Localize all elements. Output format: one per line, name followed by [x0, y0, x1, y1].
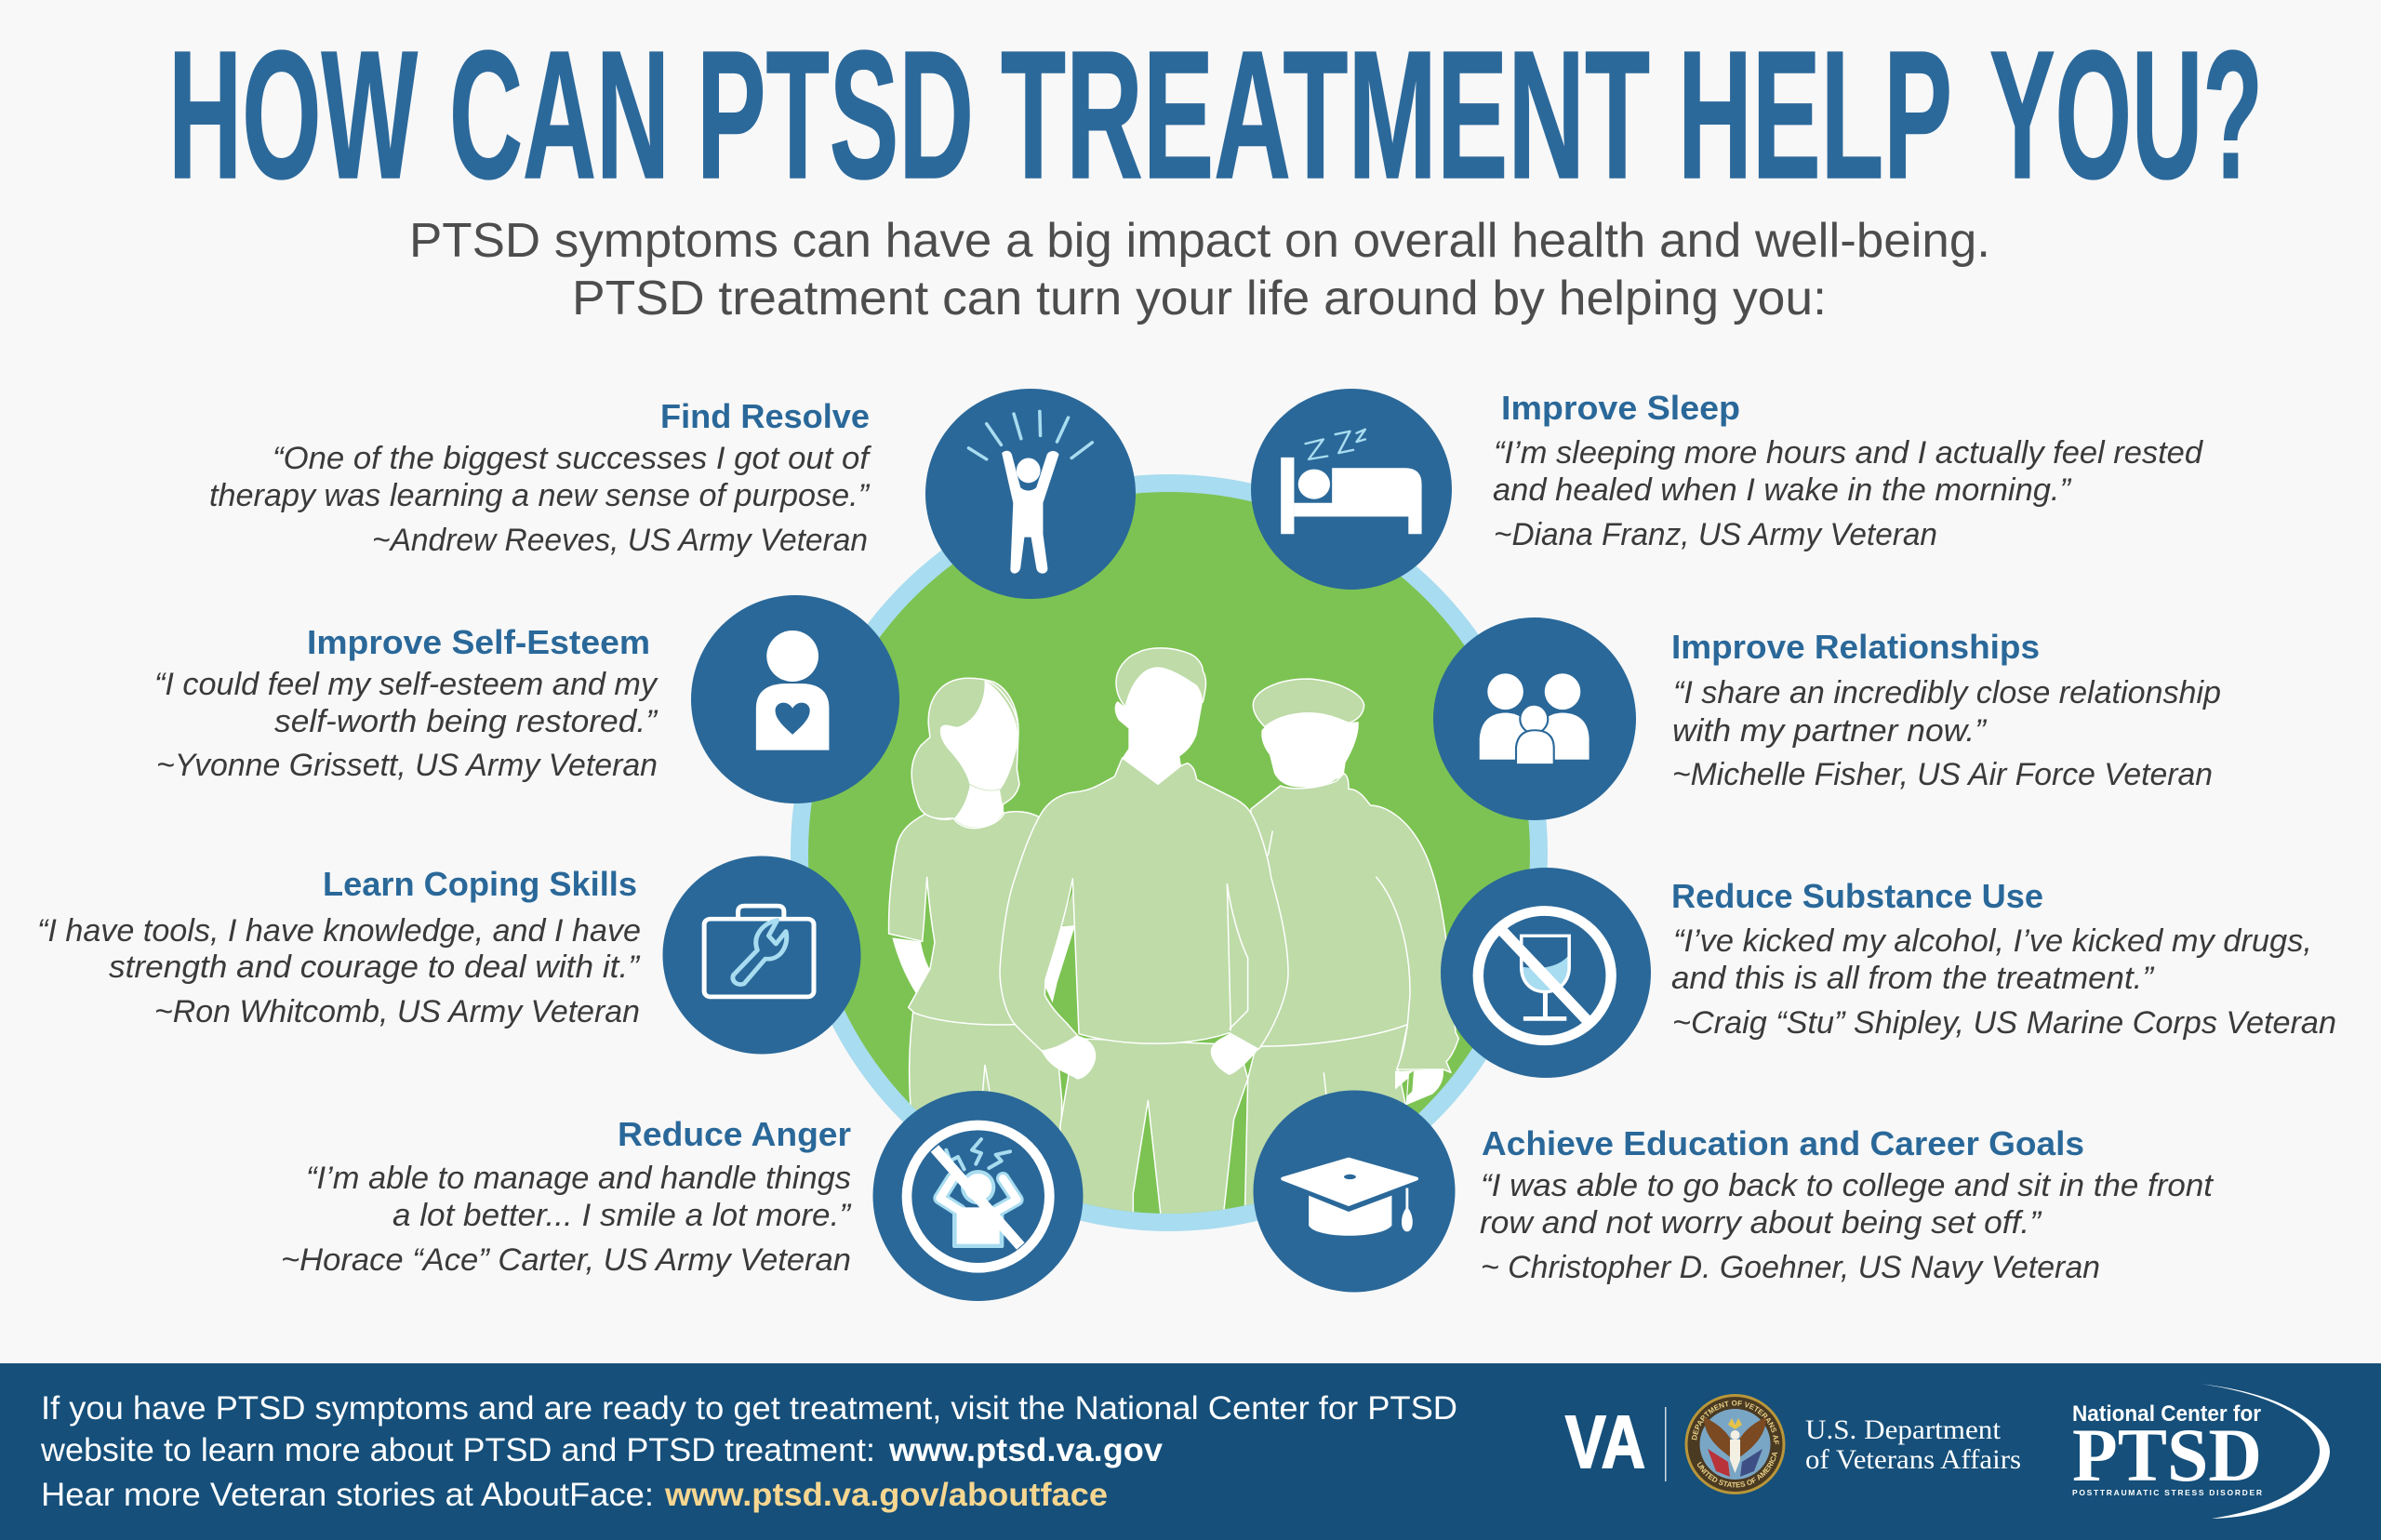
figure: woman: [887, 677, 1074, 1130]
icon: person celebrating: [968, 411, 1092, 574]
quote: self-worth being restored.”: [274, 704, 658, 739]
quote: [1493, 435, 2203, 508]
title: [168, 13, 2263, 217]
footer text: Hear more Veteran stories at AboutFace:: [41, 1477, 654, 1513]
badge: learn coping skills: [662, 856, 861, 1055]
badge: reduce anger: [872, 1091, 1083, 1301]
callout: reduce anger: [281, 1115, 852, 1278]
subtitle: PTSD symptoms can have a big impact on overall health and well-being.: [409, 214, 1990, 268]
callout: find resolve: [209, 397, 872, 558]
logo: VA: VA: [1565, 1401, 1645, 1483]
attribution: ~Michelle Fisher, US Air Force Veteran: [1672, 757, 2213, 792]
callout: improve self-esteem: [154, 623, 658, 783]
subtitle: PTSD treatment can turn your life around by helping you:: [572, 272, 1827, 325]
quote: “I’m sleeping more hours and I actually feel rested: [1494, 435, 2203, 471]
quote: “I have tools, I have knowledge, and I have: [37, 913, 641, 949]
badge: find resolve: [925, 389, 1136, 599]
footer text: [40, 1390, 1457, 1513]
badge: improve relationships: [1433, 617, 1636, 820]
heading: Learn Coping Skills: [323, 865, 637, 903]
icon: person with heart: [756, 631, 829, 750]
heading: Achieve Education and Career Goals: [1482, 1124, 2084, 1162]
logo: department name: U.S. Department: [1805, 1414, 2002, 1445]
quote: “I’ve kicked my alcohol, I’ve kicked my drugs,: [1673, 923, 2312, 959]
figure: central man: [1000, 648, 1288, 1218]
footer text: www.ptsd.va.gov/aboutface: [664, 1477, 1108, 1513]
quote: [154, 667, 658, 739]
badge: education and career: [1254, 1090, 1455, 1293]
heading: Improve Relationships: [1671, 628, 2040, 666]
figure: older man: [1244, 679, 1458, 1218]
callout: learn coping skills: [37, 865, 641, 1029]
quote: [1672, 675, 2221, 749]
badge: improve sleep: [1251, 389, 1452, 590]
callout: improve relationships: [1671, 628, 2221, 792]
title: HELP: [1678, 13, 1952, 217]
attribution: ~Ron Whitcomb, US Army Veteran: [154, 994, 640, 1029]
logo: national center for ptsd: PTSD: [2072, 1413, 2262, 1497]
heading: Reduce Substance Use: [1671, 877, 2043, 915]
quote: therapy was learning a new sense of purpose.”: [209, 478, 871, 513]
attribution: ~Horace “Ace” Carter, US Army Veteran: [281, 1242, 851, 1278]
heading: Find Resolve: [660, 397, 870, 435]
central green circle with light blue ring: [791, 474, 1548, 1231]
logo: VA seal: [1685, 1394, 1786, 1494]
quote: a lot better... I smile a lot more.”: [392, 1198, 852, 1233]
icon: toolbox with wrench: [704, 906, 814, 997]
logo: VA seal: DEPARTMENT OF VETERANS AFFAIRS: [1691, 1401, 1779, 1445]
attribution: ~Yvonne Grissett, US Army Veteran: [156, 748, 658, 783]
attribution: ~Andrew Reeves, US Army Veteran: [372, 523, 868, 558]
footer text: www.ptsd.va.gov: [888, 1432, 1164, 1468]
callout: reduce substance use: [1671, 877, 2336, 1041]
heading: Reduce Anger: [618, 1115, 851, 1153]
quote: “I share an incredibly close relationship: [1673, 675, 2221, 710]
quote: [306, 1161, 852, 1233]
logo: national center for ptsd: National Center for: [2072, 1401, 2261, 1427]
logo: department name: of Veterans Affairs: [1805, 1444, 2021, 1475]
subtitle: [409, 214, 1990, 325]
attribution: ~Craig “Stu” Shipley, US Marine Corps Veteran: [1672, 1005, 2336, 1041]
callout: improve sleep: [1493, 389, 2203, 552]
title: HOW: [168, 13, 418, 217]
footer text: If you have PTSD symptoms and are ready to get treatment, visit the National Center for PTSD: [41, 1390, 1457, 1427]
quote: “One of the biggest successes I got out of: [273, 441, 872, 476]
quote: strength and courage to deal with it.”: [109, 949, 641, 985]
quote: “I could feel my self-esteem and my: [154, 667, 658, 702]
icon: graduation cap: [1283, 1160, 1417, 1236]
icon: no anger: [907, 1125, 1049, 1268]
icon: no alcohol: [1478, 910, 1611, 1041]
icon: bed with sleeper: [1281, 430, 1422, 534]
logo: department name: [1805, 1414, 2021, 1475]
badge: improve self-esteem: [691, 595, 899, 803]
logo: national center for ptsd: [2072, 1384, 2330, 1519]
quote: [37, 913, 641, 985]
callout: education and career goals: [1480, 1124, 2215, 1285]
quote: with my partner now.”: [1672, 713, 1988, 749]
attribution: ~ Christopher D. Goehner, US Navy Veteran: [1481, 1250, 2100, 1285]
heading: Improve Self-Esteem: [307, 623, 650, 661]
quote: and healed when I wake in the morning.”: [1493, 472, 2072, 508]
heading: Improve Sleep: [1501, 389, 1740, 427]
quote: [1671, 923, 2312, 996]
quote: [1480, 1168, 2215, 1241]
badge: reduce substance use: [1441, 868, 1651, 1078]
logo: VA seal: UNITED STATES OF AMERICA: [1696, 1453, 1778, 1488]
title: PTSD: [697, 13, 974, 217]
logo: national center for ptsd: POSTTRAUMATIC STRESS DISORDER: [2072, 1488, 2262, 1497]
illustration: three veterans: [889, 648, 1458, 1218]
title: CAN: [449, 13, 670, 217]
quote: and this is all from the treatment.”: [1671, 961, 2155, 996]
quote: [209, 441, 872, 513]
quote: “I’m able to manage and handle things: [306, 1161, 851, 1196]
footer text: website to learn more about PTSD and PTSD treatment:: [40, 1432, 875, 1468]
logo divider: [1665, 1407, 1667, 1481]
icon: family: [1480, 673, 1590, 764]
attribution: ~Diana Franz, US Army Veteran: [1494, 517, 1937, 552]
quote: row and not worry about being set off.”: [1480, 1205, 2042, 1241]
quote: “I was able to go back to college and sit in the front: [1481, 1168, 2215, 1203]
title: TREATMENT: [1001, 13, 1650, 217]
